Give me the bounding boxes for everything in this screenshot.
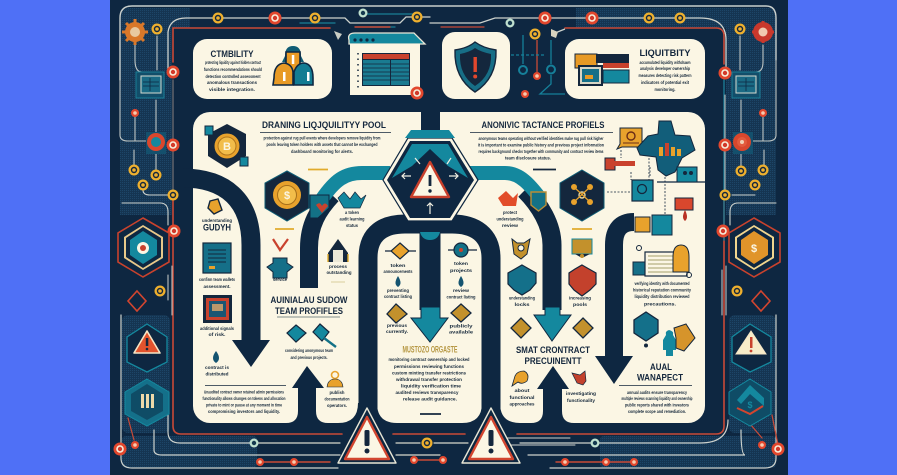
- text block: liquidity: indicators of potential exit: [641, 80, 689, 85]
- circuit nodes top and left: [114, 8, 784, 466]
- text block: locks: [514, 302, 530, 307]
- icon: shield outline: [531, 192, 546, 211]
- text block: cmbility: functions recommendations should: [204, 67, 262, 72]
- textured circuit side panels: [120, 8, 776, 468]
- text block: [326, 264, 352, 275]
- icon: teal coin: [448, 243, 477, 257]
- text block: review: [453, 288, 469, 293]
- icon: teal hex right: $: [747, 400, 753, 410]
- central warning hexagon: [383, 130, 478, 240]
- text block: understanding: [509, 296, 535, 300]
- text block: cmbility: detection controlled assessment: [206, 74, 261, 79]
- panel: shield: [442, 32, 510, 99]
- text block: crown: a token: [345, 210, 359, 215]
- bar accent: [275, 170, 328, 229]
- heading: smart contract: SMAT CRONTRACT: [516, 345, 590, 356]
- text block: confirm team wallets: [199, 277, 235, 282]
- text block: splash: protect: [503, 210, 517, 215]
- text block: cmbility: visible integration.: [209, 87, 255, 92]
- icon: red gear right: [752, 21, 774, 43]
- dot: [644, 344, 648, 348]
- text block: [450, 261, 473, 273]
- arrows and notches: [232, 340, 633, 423]
- text block: increasing: [569, 296, 591, 300]
- title: anonymous profiles: ANONIVIC TACTANCE PROFIELS: [482, 120, 604, 131]
- icon: red chevron: [273, 239, 288, 250]
- icon: drop: [213, 351, 219, 363]
- text block: pools: [573, 302, 588, 307]
- text block: about: [514, 388, 530, 393]
- text block: [388, 357, 470, 402]
- icon: right hex badge: $: [751, 243, 757, 255]
- icon: liquidity folders: [575, 54, 629, 86]
- icon: orange key: [512, 371, 528, 386]
- label: guidance: understanding: [202, 218, 232, 223]
- text block: draining: protection against rug pull events where developers remove liquidity from: [264, 136, 380, 140]
- rule: [260, 132, 391, 134]
- arrow: teal middle down: [411, 307, 448, 342]
- text block: preventing: [387, 288, 409, 293]
- text: service: [273, 277, 287, 282]
- text block: process: [329, 264, 347, 269]
- text block: liquidity: measures detecting risk pattern: [638, 73, 692, 78]
- heading: aual wanapect: [637, 362, 683, 384]
- icon: chip left: [136, 72, 164, 98]
- text block: anonymous: anonymous teams operating without verified identities make rug pull risk higher: [478, 136, 604, 141]
- icon: alert hex left: [127, 324, 167, 372]
- text block: approaches: [510, 402, 535, 406]
- text block: [205, 365, 229, 376]
- text block: [446, 288, 476, 300]
- panel: main content body: [193, 112, 705, 423]
- text block: contract listing: [384, 294, 412, 299]
- text block: public reports shared with investors: [625, 402, 689, 408]
- rule: [205, 384, 286, 386]
- text block: annual audits ensure transparency: [627, 390, 687, 395]
- heading: smart contract: [516, 345, 590, 367]
- navy poster: [110, 0, 788, 475]
- icon: red heart: [316, 203, 328, 213]
- icon: diamond: [451, 304, 471, 322]
- text block: [566, 391, 596, 403]
- icon: drop: [396, 276, 400, 287]
- icon: teal hex right: [729, 379, 771, 426]
- icon: teal crown: [338, 192, 366, 208]
- text block: [569, 296, 591, 307]
- bar accent: [533, 168, 556, 170]
- circuit traces: [120, 6, 778, 468]
- second column content: [267, 239, 352, 408]
- text block: anonymous: requires background checks together with community and contract review items: [478, 149, 604, 154]
- text block: [384, 263, 413, 274]
- icon: padlock trio: [273, 46, 313, 85]
- text block: [384, 288, 412, 299]
- icon: browser window: [349, 33, 425, 95]
- icon: badge: [208, 199, 222, 214]
- text block: anonymous: it is important to examine public history and previous project information: [478, 142, 604, 148]
- text block: liquidity: [638, 60, 692, 92]
- text block: release audit guidance.: [403, 396, 457, 402]
- icon: coin hexagon large: [265, 171, 309, 221]
- text block: monitoring contract ownership and locked: [388, 357, 470, 362]
- text block: considering anonymous team: [285, 348, 333, 353]
- text block: custom minting transfer restrictions: [392, 370, 466, 376]
- icon: left hex badge: [118, 218, 169, 277]
- text block: private to mint or pause at any moment in time: [206, 402, 282, 408]
- cream content panels: [193, 32, 705, 423]
- title: cmbility: CTMBILITY: [210, 49, 254, 60]
- icon: teal hexagon: [634, 312, 658, 341]
- text block: draining: pools leaving token holders with assets that cannot be exchanged: [266, 142, 378, 147]
- bar accent: [572, 228, 592, 230]
- text block: token: [390, 263, 406, 268]
- text block: splash: [496, 210, 524, 228]
- text block: liquidity: accumulated liquidity withdrawn: [640, 60, 691, 65]
- text block: token: [454, 261, 468, 266]
- icon: magnifier: [313, 324, 336, 347]
- text block: historical reputation community: [633, 288, 691, 292]
- icon: red star: [569, 265, 596, 296]
- icon: diamond: [387, 304, 407, 323]
- text block: functionality: [567, 398, 595, 403]
- navy flow channels: [182, 105, 705, 430]
- arrow: contract up: [531, 366, 574, 423]
- icon: diamond right: [752, 291, 770, 311]
- title: liquidity: LIQUITBITY: [640, 48, 691, 59]
- text block: contract listing: [446, 294, 476, 300]
- warning triangle left: [338, 408, 396, 463]
- text block: audited reviews transparency: [396, 390, 459, 395]
- icon: alert hex right: [732, 324, 771, 372]
- right columns content: [508, 239, 695, 414]
- notch: mid right: [462, 403, 520, 423]
- text block: currently.: [386, 329, 408, 334]
- text block: additional signals: [200, 326, 234, 331]
- text block: liquidity verification time: [401, 384, 461, 388]
- icon: coin hexagon large: $: [284, 190, 290, 202]
- arrow: right down: [595, 356, 633, 384]
- text block: anonymous: team disclosure status.: [505, 156, 551, 160]
- text block: [622, 390, 693, 414]
- icon: person: [327, 372, 343, 387]
- heading: team profiles: TEAM PROFIFLES: [275, 306, 343, 317]
- text block: liquidity: monitoring.: [654, 87, 676, 92]
- text block: [509, 296, 535, 307]
- text block: precautions.: [644, 302, 676, 306]
- text block: liquidity: analysis developer ownership: [640, 66, 690, 71]
- text block: and previous projects.: [290, 355, 328, 360]
- heading: team profiles: [270, 295, 348, 317]
- text block: distributed: [206, 372, 229, 376]
- arrow: left up: [286, 366, 328, 423]
- text block: operators.: [327, 403, 347, 408]
- icon: landscape badge: [572, 239, 592, 258]
- text block: previous: [387, 323, 407, 328]
- icon: right hex badge: [729, 218, 780, 277]
- icon: house: [328, 239, 348, 262]
- text block: splash: review: [502, 223, 518, 228]
- text block: of risk.: [208, 332, 226, 337]
- icon: red tag: [605, 158, 635, 170]
- node cluster mid: [334, 28, 558, 98]
- text block: liquidity distribution reviewed: [634, 294, 690, 299]
- icon: data lock panel: [633, 245, 692, 278]
- icon: envelope: [267, 258, 293, 278]
- text block: multiple reviews scanning liquidity and ownership: [622, 396, 693, 401]
- circuit: mid connectors: [511, 29, 565, 94]
- text block: [633, 281, 691, 306]
- text block: documentation: [324, 396, 350, 402]
- text block: splash: understanding: [496, 216, 524, 222]
- heading: aual wanapect: AUAL: [650, 362, 672, 373]
- heading: gudyh: GUDYH: [203, 222, 231, 234]
- text block: withdrawal transfer protection: [395, 377, 462, 382]
- icon: target left: [146, 132, 166, 154]
- icon: orange splash: [498, 191, 518, 206]
- rule: [470, 132, 613, 134]
- warning triangle right: [462, 408, 520, 463]
- icon: diamond coin: [385, 243, 416, 259]
- text block: complete scope and remediation.: [628, 409, 686, 414]
- icon: node hexagon: [560, 170, 604, 221]
- text block: crown: status: [346, 223, 358, 228]
- heading: aual wanapect: WANAPECT: [637, 372, 683, 384]
- arrow: teal contract down: [534, 307, 571, 341]
- icon: broken heart shield: [310, 195, 329, 218]
- text block: [449, 324, 474, 334]
- middle column content: [384, 243, 477, 414]
- rule: [277, 316, 340, 318]
- text block: verifying identity with documented: [634, 281, 690, 286]
- text block: cmbility: protecting liquidity against hidden contract: [205, 60, 261, 65]
- panel: liquidity: [565, 39, 705, 99]
- icon: framed picture: [203, 295, 232, 323]
- heading: smart contract: PRECUINENTT: [524, 356, 582, 367]
- icon: teal box: [632, 180, 653, 201]
- text block: investigating: [566, 391, 596, 396]
- text block: cmbility: [204, 60, 262, 92]
- icon: chip right: [732, 72, 760, 98]
- heading: team profiles: AUINIALAU SUDOW: [270, 295, 348, 306]
- text block: Unaudited contract owner retained admin permissions: [204, 390, 284, 394]
- text block: [202, 390, 286, 414]
- left column content: [199, 199, 286, 414]
- text block: [324, 390, 350, 408]
- text block: publish: [330, 390, 345, 395]
- text block: draining: [264, 136, 380, 154]
- icon: node on browser: [410, 86, 424, 100]
- teal flow bands: [322, 173, 540, 199]
- text block: [200, 326, 234, 337]
- icon: diamond: [511, 318, 531, 338]
- icon: gold folder: [674, 324, 695, 351]
- text block: [510, 388, 535, 406]
- icon: network map chart: [607, 121, 695, 225]
- icon: gold chevron badge: [512, 239, 530, 259]
- text block: [386, 323, 408, 334]
- panel: cmbility: [193, 39, 332, 99]
- icon: teal person: [663, 330, 676, 356]
- text block: publicly: [450, 324, 473, 328]
- icon: coin hexagon small: [205, 124, 248, 168]
- icon: teal star: [508, 265, 536, 295]
- icon: coin hexagon small: B: [223, 141, 231, 153]
- heading: mustozo orgaste: MUSTOZO ORGASTE: [402, 344, 458, 356]
- icon: red drop: [675, 198, 693, 221]
- icon: diamond: [573, 318, 593, 338]
- icon: red splash: [572, 371, 586, 385]
- icon: drop: [458, 276, 464, 287]
- icon: teal small box: [677, 167, 697, 182]
- title: draining liquidity pool: DRANING LIQJQUILITYY POOL: [262, 120, 386, 131]
- text block: crown: audit learning: [340, 216, 365, 222]
- text block: [199, 277, 235, 289]
- text block: compromising investors and liquidity.: [208, 409, 280, 414]
- text block: projects: [450, 268, 473, 273]
- text block: [285, 348, 333, 360]
- icon: target right: [733, 132, 753, 154]
- text block: available: [449, 330, 474, 334]
- text block: draining: dashboard monitoring for alerts.: [291, 149, 353, 154]
- text block: functionality allows changes on tokens and allocation: [202, 396, 286, 401]
- icon: document: [203, 243, 231, 273]
- icon: shield: [455, 42, 496, 92]
- icon: orange alert box: [617, 128, 642, 149]
- text block: permissions reviewing functions: [394, 364, 464, 369]
- text block: outstanding: [326, 270, 352, 275]
- bar accent: [420, 413, 441, 415]
- text block: assessment.: [204, 284, 230, 289]
- text block: anonymous: [478, 136, 604, 160]
- arrow: left down: [232, 340, 270, 367]
- icon: diamond left: [128, 291, 146, 311]
- icon: teal hex left: [125, 379, 169, 426]
- icon: right hook orange box: [635, 215, 672, 235]
- icon: teal diamond: [287, 325, 306, 342]
- text block: cmbility: anomalous transactions: [207, 80, 257, 85]
- text block: announcements: [384, 269, 413, 274]
- text block: crown: [340, 210, 365, 228]
- text block: functional: [510, 395, 534, 400]
- rule: [619, 384, 692, 386]
- icon: orange gear left: [122, 19, 148, 45]
- text block: contract is: [205, 365, 229, 370]
- bar accent: [331, 281, 345, 283]
- notch: mid left: [338, 403, 397, 423]
